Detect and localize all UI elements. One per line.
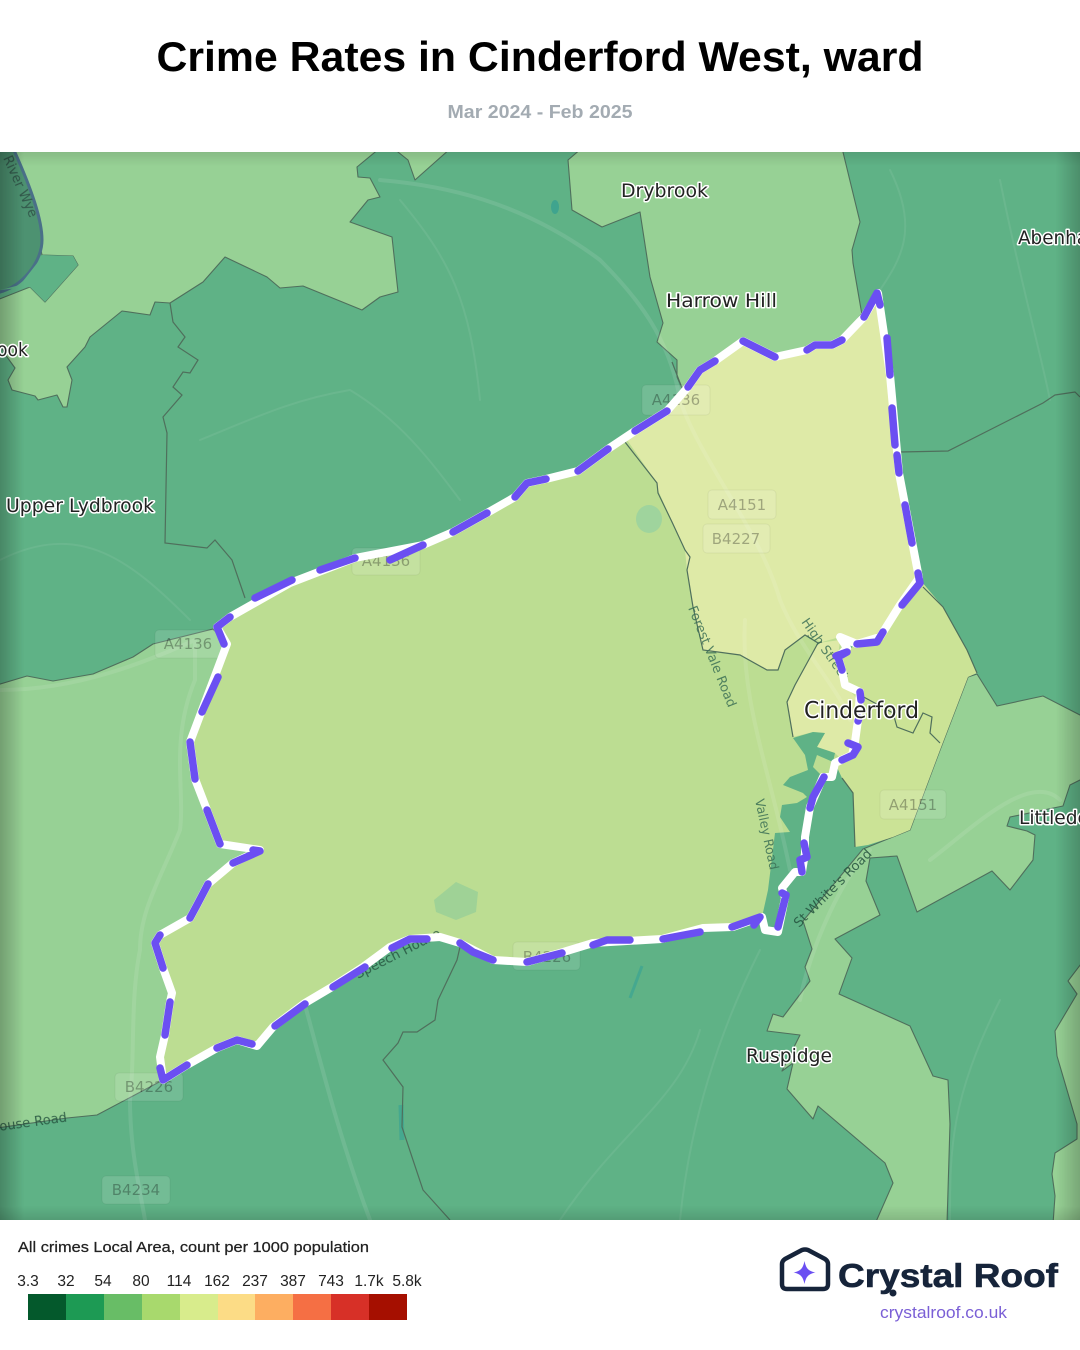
road number badges: A4136 [652,391,700,409]
icon: house with star [782,1250,828,1289]
legend colour bar [28,1294,407,1320]
choropleth areas: light green [0,148,1080,1224]
road number badges: A4151 [889,796,937,814]
east cinderford area [835,582,977,847]
place labels: Drybrook [621,180,708,202]
small area beside river [0,255,78,302]
map panel [0,148,1080,1224]
area boundary lines [163,303,1080,1220]
legend scale labels: 1.7k [354,1273,384,1290]
legend scale labels: 387 [280,1273,306,1290]
place labels: Upper Lydbrook [6,495,154,517]
legend scale labels: 114 [167,1273,192,1290]
icon: key dot on y [890,1290,896,1296]
road names [0,154,875,1135]
website url: crystalroof.co.uk [880,1304,1008,1322]
roads [0,170,1060,1220]
road number badges: A4136 [362,552,410,570]
road number badges: B4234 [112,1181,160,1199]
road number badges: A4136 [164,635,212,653]
river wye [0,148,42,293]
central cinderford pale area [787,640,858,760]
legend scale labels: 80 [132,1273,150,1290]
road names: ouse Road [0,1111,68,1135]
road names: High Street [798,616,851,683]
small water and woodland details [401,200,662,1140]
legend [17,1239,422,1320]
place labels [0,180,1080,1067]
legend scale labels: 743 [318,1273,344,1290]
road number badges: B4226 [125,1078,173,1096]
logo: crystal roof [782,1250,1059,1322]
legend scale labels [17,1273,422,1290]
edge shading [0,152,1080,1220]
place labels: Harrow Hill [666,290,777,312]
road number badges [102,385,946,1204]
road names: Valley Road [751,798,781,871]
legend title: All crimes Local Area, count per 1000 population [18,1239,369,1256]
place labels: Cinderford [804,698,919,724]
dark patch in town [762,732,835,928]
wordmark: Crystal Roof [838,1257,1059,1294]
ward boundary: white line [155,293,919,1080]
ward area: yellow-green [160,440,856,1074]
legend scale labels: 162 [204,1273,230,1290]
legend scale labels: 32 [57,1273,75,1290]
road number badges: B4226 [523,948,571,966]
road names: St White's Road [791,847,875,931]
legend scale labels: 3.3 [17,1273,39,1290]
ward boundary: purple dashes [155,293,920,1080]
road number badges: B4227 [712,530,760,548]
road names: Forest Vale Road [684,604,739,710]
legend scale labels: 5.8k [392,1273,422,1290]
legend scale labels: 237 [242,1273,268,1290]
legend scale labels: 54 [94,1273,112,1290]
ward area: pale north east [625,293,919,670]
road names: River Wye [0,154,40,220]
road number badges: A4151 [718,496,766,514]
place labels: Ruspidge [746,1045,832,1067]
subtitle: date range: Mar 2024 - Feb 2025 [448,101,632,122]
title: Crime Rates in Cinderford West, ward [156,33,924,80]
road names: Speech House [353,927,444,983]
